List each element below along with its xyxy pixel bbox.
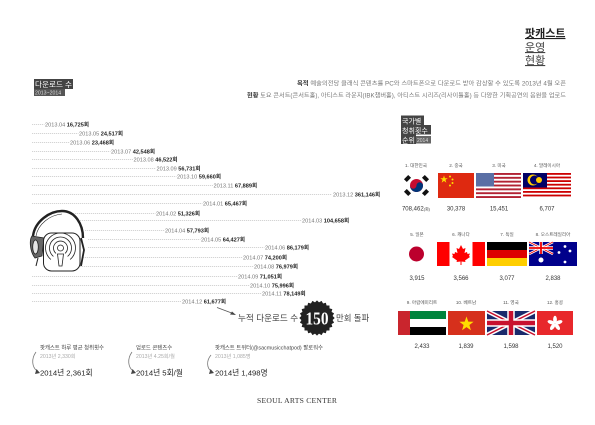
chart: monthly downloads dashed lines: 2013.12 361,146회 (333, 190, 380, 198)
flag: Japan (409, 246, 424, 262)
chart: monthly downloads dashed lines: 2014.07 74,200회 (243, 254, 287, 262)
stat: monthly uploads (129, 344, 183, 378)
country 9: UAE: 9. 아랍에미리트 (407, 299, 437, 306)
chart: monthly downloads dashed lines: 2014.09 71,051회 (238, 272, 282, 280)
chart: monthly downloads dashed lines: 2013.08 46,522회 (134, 156, 178, 164)
stat: twitter followers: 2014년 1,498명 (215, 368, 268, 378)
chart: monthly downloads dashed lines: 2014.11 78,149회 (262, 290, 306, 298)
chart: monthly downloads dashed lines: 2014.08 76,979회 (254, 262, 298, 270)
flag: Hong Kong (537, 311, 573, 335)
icon: headphones with podcast symbol (30, 211, 84, 271)
country 6: Canada (437, 231, 485, 282)
country 1: Korea: 1. 대한민국 (405, 162, 427, 169)
stat: daily average plays: 팟캐스트 하루 평균 청취횟수 (40, 344, 104, 352)
country 2: China: 30,378 (447, 206, 466, 212)
stat: daily average plays: 2013년 2,330회 (40, 352, 76, 360)
stat: twitter followers: 팟캐스트 트위터(@sacmusicchatpod) 팔로워수 (215, 344, 323, 352)
country 8: Australia: 8. 오스트레일리아 (536, 231, 571, 238)
country 6: Canada: 3,566 (453, 276, 469, 282)
footer logo text: SEOUL ARTS CENTER (257, 396, 338, 405)
flag: Korea (404, 175, 429, 196)
country 7: Germany (487, 231, 527, 282)
callout: cumulative downloads 1.5 million: 누적 다운로드 수 (238, 312, 298, 323)
intro text block (247, 80, 566, 100)
country 12: Hong Kong (537, 299, 573, 350)
heading: downloads: 2013~2014 (35, 90, 61, 96)
chart: monthly downloads dashed lines: 2013.07 42,548회 (111, 148, 155, 156)
chart: monthly downloads dashed lines: 2013.05 24,517회 (79, 130, 123, 138)
flag: Malaysia (523, 173, 571, 198)
country 1: Korea: 708,462(회) (402, 206, 431, 212)
stat: daily average plays (33, 344, 104, 378)
country 2: China (438, 163, 474, 212)
chart: monthly downloads dashed lines: 2013.11 67,889회 (214, 182, 257, 190)
country 3: USA: 3. 미국 (492, 162, 506, 169)
country 11: UK: 11. 영국 (503, 299, 519, 306)
country 5: Japan: 5. 일본 (410, 231, 424, 237)
country 12: Hong Kong: 12. 홍콩 (547, 299, 563, 305)
country 12: Hong Kong: 1,520 (547, 344, 563, 350)
chart: monthly downloads dashed lines: 2014.05 64,427회 (201, 236, 245, 244)
country 5: Japan: 3,915 (409, 276, 425, 282)
flag: Australia (529, 242, 577, 266)
flag: Vietnam (448, 311, 485, 335)
chart: monthly downloads dashed lines: 2013.10 59,660회 (177, 172, 221, 180)
intro text block: 현황 토요 콘서트(콘서트홀), 아티스트 라운지(IBK챔버홀), 아티스트 시리즈(리사이틀홀) 등 다양한 기획공연의 음원을 업로드 (247, 92, 566, 100)
title: 팟캐스트 (525, 26, 565, 40)
title: 현황 (525, 54, 545, 67)
country 10: Vietnam: 1,839 (458, 344, 474, 350)
callout: cumulative downloads 1.5 million: 만회 돌파 (336, 313, 369, 323)
heading: country ranking (401, 116, 431, 144)
callout: cumulative downloads 1.5 million (238, 300, 369, 336)
country 3: USA: 15,451 (490, 206, 509, 212)
stat: monthly uploads: 2013년 4.25회/월 (136, 352, 175, 360)
country 8: Australia: 2,838 (545, 276, 561, 282)
chart: monthly downloads dashed lines: 2014.12 61,677회 (182, 298, 226, 306)
flag: UK (487, 311, 535, 335)
country 11: UK: 1,598 (503, 344, 519, 350)
country 9: UAE (398, 299, 446, 350)
chart: monthly downloads dashed lines: 2014.03 104,658회 (302, 216, 349, 224)
country 9: UAE: 2,433 (414, 344, 430, 350)
country 8: Australia (529, 231, 577, 282)
chart: monthly downloads dashed lines: 2014.10 75,996회 (250, 282, 294, 290)
heading: country ranking: 순위 (402, 136, 415, 144)
heading: country ranking: 2014 (417, 138, 428, 144)
stat: monthly uploads: 2014년 5회/월 (136, 368, 183, 378)
chart: monthly downloads dashed lines: 2014.04 57,793회 (165, 226, 209, 234)
country 1: Korea (402, 162, 431, 212)
stat: twitter followers: 2013년 1,085명 (215, 352, 251, 360)
chart: monthly downloads dashed lines: 2013.09 56,731회 (156, 164, 201, 172)
country 4: Malaysia: 6,707 (539, 206, 555, 212)
flag: Canada (437, 242, 485, 266)
country 10: Vietnam (448, 299, 485, 350)
chart: monthly downloads dashed lines: 2014.01 65,467회 (203, 200, 247, 208)
chart: monthly downloads dashed lines: 2014.02 51,326회 (156, 210, 200, 218)
flag: Germany (487, 242, 527, 266)
country 7: Germany: 7. 독일 (500, 231, 514, 238)
chart: monthly downloads dashed lines: 2013.06 23,468회 (70, 138, 114, 146)
stat: daily average plays: 2014년 2,361회 (40, 368, 93, 378)
heading: country ranking: 청취횟수 (402, 126, 428, 135)
flag: China: ★ (440, 175, 448, 184)
country 3: USA (476, 162, 521, 212)
stat: twitter followers (208, 344, 323, 378)
country 4: Malaysia (523, 162, 571, 212)
country 4: Malaysia: 4. 말레이시아 (534, 162, 561, 169)
chart: monthly downloads dashed lines (32, 120, 380, 306)
chart: monthly downloads dashed lines: 2014.06 86,179회 (265, 244, 309, 252)
stat: monthly uploads: 업로드 콘텐츠수 (136, 344, 172, 352)
flag: USA (476, 173, 521, 198)
heading: downloads: 다운로드 수 (35, 80, 72, 89)
title: 운영 (525, 41, 545, 54)
flag: UAE (398, 311, 446, 335)
country 6: Canada: 6. 캐나다 (452, 231, 471, 238)
country 11: UK (487, 299, 535, 350)
country 10: Vietnam: 10. 베트남 (456, 299, 477, 306)
country 7: Germany: 3,077 (499, 276, 515, 282)
heading: country ranking: 국가별 (402, 116, 421, 126)
country 5: Japan (409, 231, 425, 282)
starburst badge: 150 (306, 308, 328, 328)
country 2: China: 2. 중국 (449, 163, 463, 169)
arrow to cumulative total (217, 308, 236, 315)
chart: monthly downloads dashed lines: 2013.04 16,725회 (45, 120, 89, 128)
heading: downloads (34, 79, 73, 96)
title (525, 26, 565, 67)
intro text block: 목적 예술의전당 클래식 콘텐츠를 PC와 스마트폰으로 다운로드 받아 감상할 수 있도록 2013년 4월 오픈 (297, 80, 566, 88)
